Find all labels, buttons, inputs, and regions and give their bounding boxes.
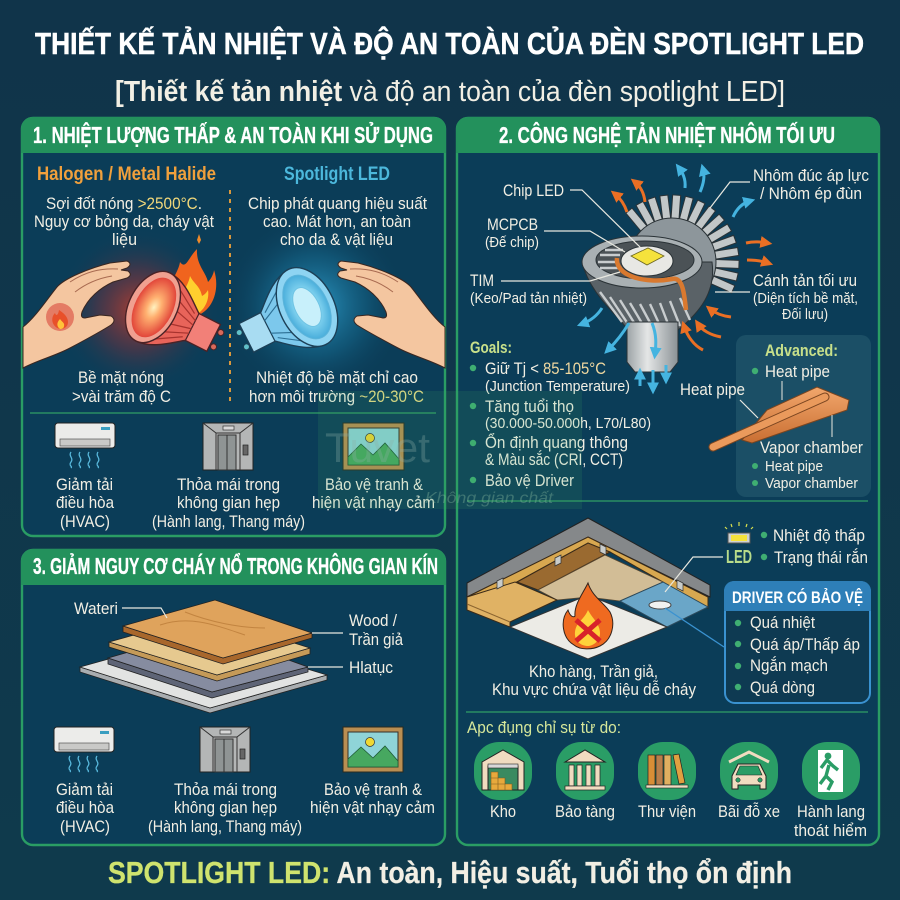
label: TIM [470,271,620,307]
goals heading: Goals: [470,338,512,357]
LED chip [631,248,664,265]
label: MCPCB: (Đế chip) [485,234,539,251]
driver protection box: Quá áp/Thấp áp [750,635,860,654]
LED properties [761,526,868,567]
goals list: Tăng tuổi thọ [485,397,574,416]
watermark [318,391,582,509]
red glow [56,228,220,392]
watermark: Tuvet [325,424,430,471]
driver box header [724,581,871,611]
application: warehouse [474,742,532,821]
label: Hlatục: Hlatục [349,658,393,677]
panel 3 header [21,549,446,585]
panel 1: low heat and safety [21,117,446,536]
label: optimised fins: (Diện tích bề mặt, [753,290,858,307]
LED properties: Trạng thái rắn [774,548,868,567]
LED description: cho da & vật liệu [280,230,393,249]
benefit: narrow spaces: không gian hẹp [174,798,277,817]
benefit: HVAC: (HVAC) [60,817,110,836]
advanced box: Heat pipe [765,458,823,475]
benefit: protect artwork: hiện vật nhạy cảm [312,493,435,512]
icon: crossed-out flame [563,583,613,649]
icon: elevator [203,423,253,470]
halogen description: liệu [112,230,137,249]
icon: left hand with burn [23,261,130,368]
icon: framed picture [343,727,403,772]
label: Chip LED [503,181,643,250]
benefit: HVAC: điều hòa [56,798,114,817]
benefit: narrow spaces: Thỏa mái trong [174,780,277,799]
driver protection box: Ngắn mạch [750,656,828,675]
blue glow [223,213,407,397]
benefit: protect artwork [310,780,435,817]
icon: right hand [338,261,445,368]
goals list: (Junction Temperature) [485,378,630,395]
MCPCB [621,246,673,276]
label: Wateri [74,599,167,618]
goals list: (30.000-50.000h, L70/L80) [485,415,651,432]
goals list: Bảo vệ Driver [485,471,574,490]
application: parking: Bãi đỗ xe [718,802,780,821]
application: library: Thư viện [638,802,696,821]
benefit: protect artwork [312,475,435,512]
label: TIM: (Keo/Pad tản nhiệt) [470,290,587,307]
label: aluminium casting: Nhôm đúc áp lực [753,166,869,185]
benefit: narrow spaces: (Hành lang, Thang máy) [152,512,305,531]
copper heat pipe [713,397,825,447]
lamp bowl [582,262,713,330]
label: MCPCB: MCPCB [487,215,538,234]
goals list: Ổn định quang thông [485,433,628,452]
benefit: HVAC [56,475,114,531]
watermark: Không gian chất [425,490,554,507]
benefit: narrow spaces: không gian hẹp [177,493,280,512]
application: parking [718,742,780,821]
label: aluminium casting [710,166,869,208]
ceiling caption: Khu vực chứa vật liệu dễ cháy [492,680,696,699]
advanced box: Heat pipe [765,362,830,381]
goals list [470,338,651,490]
benefit: HVAC: điều hòa [56,493,114,512]
label: wood ceiling: Trần giả [349,630,403,649]
label: heat pipe: Heat pipe [680,380,745,399]
lamp neck [627,322,678,372]
driver protection box: Quá dòng [750,678,815,697]
goals list: & Màu sắc (CRI, CCT) [485,450,623,469]
halogen description: Nguy cơ bỏng da, cháy vật [34,212,214,231]
label: optimised fins: Đối lưu) [782,306,828,323]
material layers diagram [80,600,327,713]
application: library [638,742,696,821]
airflow arrows [582,168,768,389]
panel 1 heading: 1. NHIỆT LƯỢNG THẤP & AN TOÀN KHI SỬ DỤNG [33,120,433,148]
halogen description [34,194,214,249]
benefit: protect artwork: Bảo vệ tranh & [325,475,424,494]
halogen surface note: Bề mặt nóng [78,368,164,387]
applications heading: Apc đụng chỉ sụ từ do: [467,718,621,737]
label: Wateri: Wateri [74,599,118,618]
benefit: narrow spaces: Thỏa mái trong [177,475,280,494]
icon: halogen bulb [114,262,237,375]
driver heading: DRIVER CÓ BẢO VỆ [732,588,863,607]
application: emergency exit corridor [794,742,867,840]
LED description: Chip phát quang hiệu suất [248,194,427,213]
benefit: narrow spaces: (Hành lang, Thang máy) [148,817,302,836]
footer tagline: SPOTLIGHT LED: An toàn, Hiệu suất, Tuổi thọ ổn định [108,855,792,890]
benefit: HVAC: (HVAC) [60,512,110,531]
label: wood ceiling [312,611,403,649]
lamp rim [582,236,702,288]
halogen description: Sợi đốt nóng >2500°C. [46,194,202,213]
advanced box [713,335,871,497]
application: museum [555,742,615,821]
advanced heading: Advanced: [765,341,838,360]
benefit: HVAC: Giảm tải [56,780,113,799]
halogen surface note: >vài trăm độ C [72,387,171,406]
label: TIM: TIM [470,271,494,290]
benefit: narrow spaces [152,475,305,531]
driver protection box: Quá nhiệt [750,613,815,632]
LED surface note: Nhiệt độ bề mặt chỉ cao [256,368,418,387]
heatsink fins [626,195,739,293]
icon: framed picture [343,423,404,470]
label: optimised fins [715,271,858,323]
benefit: protect artwork: Bảo vệ tranh & [324,780,423,799]
label: wood ceiling: Wood / [349,611,397,630]
advanced box: Vapor chamber [765,475,858,492]
subtitle: [Thiết kế tản nhiệt và độ an toàn của đèn spotlight LED] [115,76,785,108]
ceiling caption: Kho hàng, Trần giả, [529,662,658,681]
ceiling caption [492,662,696,699]
advanced box: Vapor chamber [760,438,863,457]
icon: air conditioner [54,727,114,772]
driver protection box [724,581,871,703]
icon: LED chip [725,522,753,543]
ceiling cross-section illustration [467,518,710,659]
LED surface note [249,368,424,406]
panel 2: aluminium heatsink technology [456,117,880,845]
application: warehouse: Kho [490,802,516,821]
label: Chip LED: Chip LED [503,181,564,200]
icon: flames [170,234,216,317]
icon: LED bulb [221,257,350,378]
application: emergency exit corridor: thoát hiểm [794,821,867,840]
label: aluminium casting: / Nhôm ép đùn [760,184,862,203]
panel 1 header [21,117,446,153]
panel 2 header [456,117,880,153]
benefit: HVAC [56,780,114,836]
benefit: narrow spaces [148,780,302,836]
thermal interface copper [617,258,686,310]
application: emergency exit corridor: Hành lang [797,802,865,821]
goals list: Giữ Tj < 85-105°C [485,359,606,378]
application: museum: Bảo tàng [555,802,615,821]
LED description: cao. Mát hơn, an toàn [263,212,411,231]
halogen surface note [72,368,171,406]
icon: elevator [200,727,250,772]
label: MCPCB [485,215,625,252]
LED surface note: hơn môi trường ~20-30°C [249,387,424,406]
halogen heading: Halogen / Metal Halide [37,164,216,185]
LED properties: Nhiệt độ thấp [773,526,865,545]
panel 3: reducing fire risk [21,549,446,845]
label: optimised fins: Cánh tản tối ưu [753,271,857,290]
LED label: LED [726,547,752,567]
label: heat pipe [680,380,758,418]
label: Hlatục [308,658,393,677]
icon: air conditioner [55,423,115,468]
benefit: HVAC: Giảm tải [56,475,113,494]
panel 3 heading: 3. GIẢM NGUY CƠ CHÁY NỔ TRONG KHÔNG GIAN KÍN [33,551,438,579]
LED heatsink lamp illustration [582,195,739,372]
LED heading: Spotlight LED [284,164,390,185]
LED description [248,194,427,249]
copper vapor chamber [742,387,849,443]
benefit: protect artwork: hiện vật nhạy cảm [310,798,435,817]
